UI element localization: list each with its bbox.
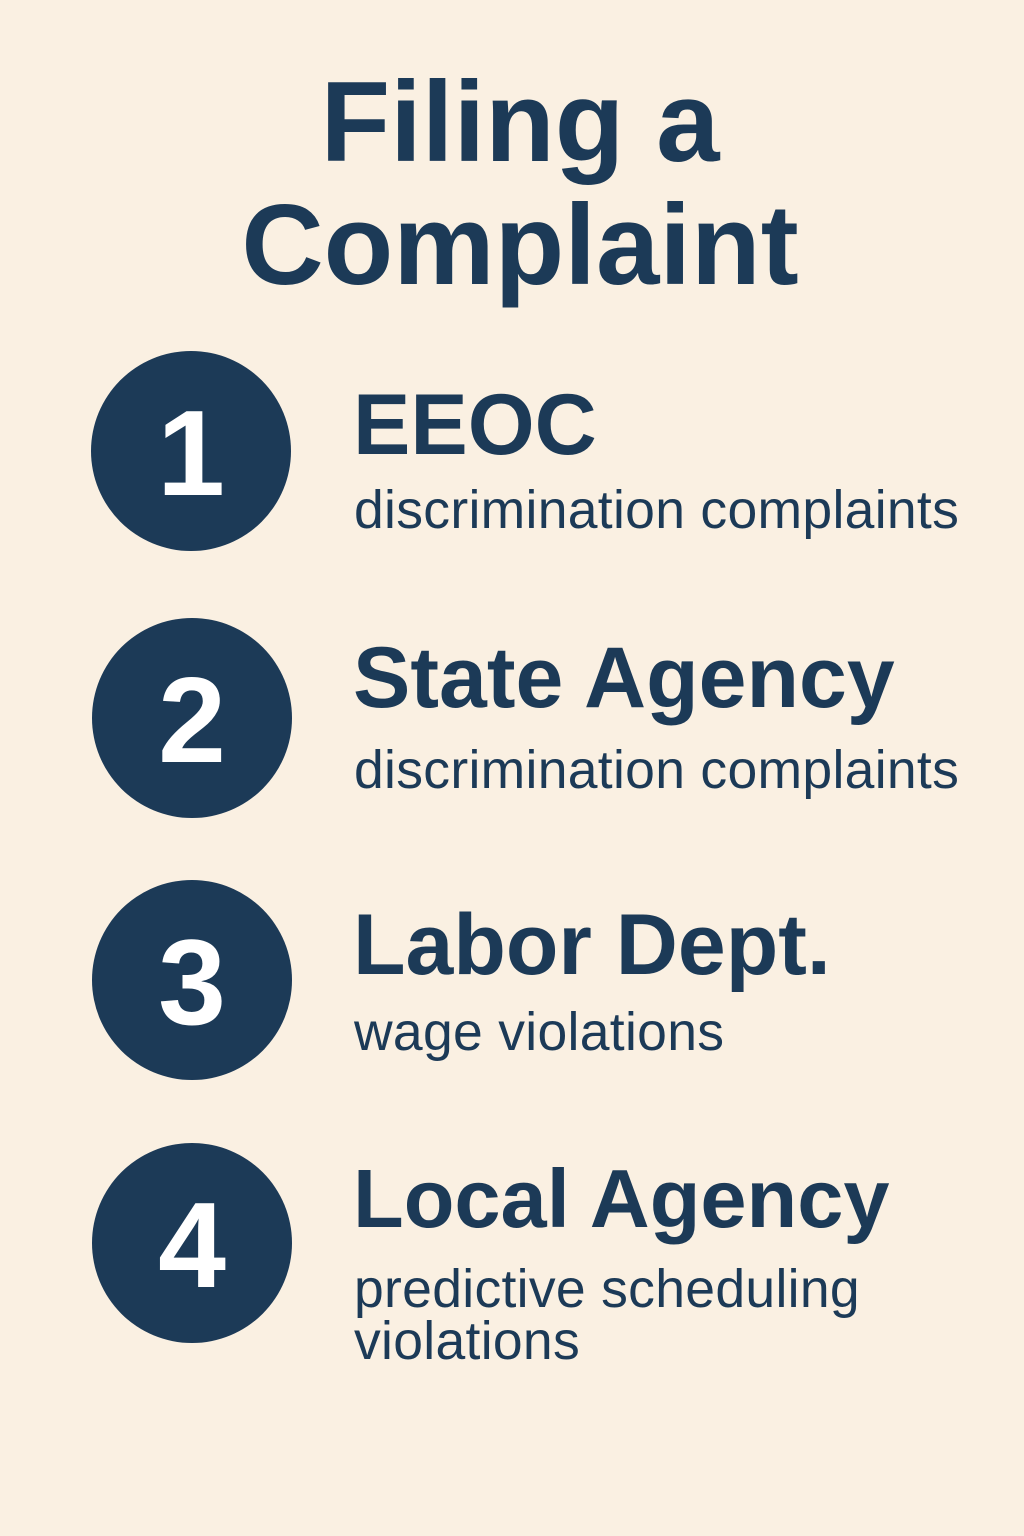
heading 4: Local Agency [353,1152,890,1245]
circle 3 [92,880,292,1080]
title [241,59,799,309]
circle 4 [92,1143,292,1343]
circle 1 [91,351,291,551]
subtitle 4: predictive scheduling [354,1260,860,1319]
circle 4: 4 [158,1177,226,1313]
title: Filing a [320,59,720,186]
subtitle 2: discrimination complaints [354,741,959,800]
subtitle 4 [354,1260,860,1371]
subtitle 3: wage violations [354,1003,724,1062]
subtitle 4: violations [354,1312,580,1371]
circle 2 [92,618,292,818]
subtitle 1: discrimination complaints [354,481,959,540]
heading 2: State Agency [353,630,895,726]
circle 1: 1 [157,385,225,521]
circle 2: 2 [158,652,226,788]
heading 1: EEOC [353,377,597,473]
title: Complaint [241,182,799,309]
circle 3: 3 [158,914,226,1050]
heading 3: Labor Dept. [353,897,831,993]
